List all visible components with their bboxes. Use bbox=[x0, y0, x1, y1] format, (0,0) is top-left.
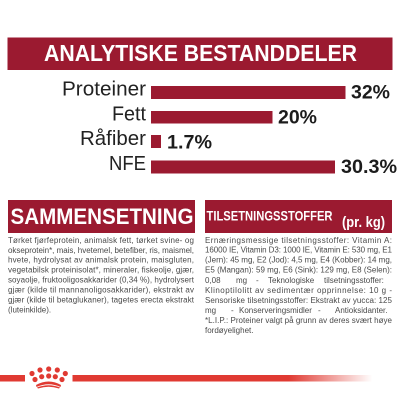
text block: additives: mg bbox=[236, 276, 247, 285]
row: NFE 30.3%: NFE bbox=[109, 153, 146, 175]
text block: additives: Antioksidanter. bbox=[335, 306, 387, 315]
row: Proteiner 32%: 32% bbox=[351, 82, 390, 104]
row: Fett 20% bbox=[112, 104, 317, 128]
heading: Sammensetning: SAMMENSETNING bbox=[10, 204, 194, 229]
text block: additives: Teknologiske bbox=[268, 276, 315, 285]
text block: additives: Sensoriske tilsetningsstoffer: Ekstrakt av yucca: 125 bbox=[205, 296, 393, 305]
row: Proteiner 32%: Proteiner bbox=[62, 78, 146, 100]
text block: additives bbox=[205, 236, 393, 335]
text block: additives: fordøyelighet. bbox=[205, 326, 253, 335]
footer line bbox=[0, 375, 372, 382]
row: Fett 20%: Fett bbox=[112, 104, 146, 126]
text block: additives: E5 (Mangan): 59 mg, E6 (Sink): 129 mg, E8 (Selen): bbox=[205, 266, 392, 274]
text block: composition: okseprotein*, mais, hvetemel, betefiber, ris, maismel, bbox=[8, 246, 194, 255]
text block: composition: Tørket fjørfeprotein, animalsk fett, tørket svine- og bbox=[8, 236, 194, 245]
row: NFE 30.3%: 30.3% bbox=[341, 157, 397, 178]
text block: composition: (luteinkilde). bbox=[8, 306, 51, 314]
row: Råfiber 1.7% bbox=[80, 128, 212, 154]
text block: additives: - bbox=[318, 306, 321, 315]
text block: additives: Konserveringsmidler bbox=[239, 306, 312, 315]
text block: composition: vegetabilsk proteinisolat*, mineraler, fiskeolje, gjær, bbox=[8, 266, 194, 274]
heading: Tilsetningsstoffer bbox=[205, 200, 392, 233]
icon: crown logo bbox=[29, 366, 68, 388]
heading: Tilsetningsstoffer: TILSETNINGSSTOFFER bbox=[206, 208, 332, 224]
text block: additives: (Jern): 45 mg, E2 (Jod): 4,5 mg, E4 (Kobber): 14 mg, bbox=[205, 256, 392, 264]
text block: additives: Ernæringsmessige tilsetningsstoffer: Vitamin A: bbox=[205, 236, 392, 245]
row: NFE 30.3% bbox=[109, 153, 397, 178]
title banner: ANALYTISKE BESTANDDELER bbox=[44, 40, 357, 66]
text block: composition: gjær (kilde til mannanoligosakkarider), ekstrakt av bbox=[8, 286, 194, 294]
row: Råfiber 1.7%: Råfiber bbox=[80, 128, 146, 150]
row: Fett 20%: 20% bbox=[278, 108, 317, 128]
text block: additives: mg bbox=[205, 306, 216, 315]
row: Råfiber 1.7%: 1.7% bbox=[167, 132, 212, 154]
text block: composition: gjær (kilde til betaglukaner), tagetes erecta ekstrakt bbox=[8, 296, 195, 304]
text block: additives: - bbox=[231, 306, 234, 315]
text block: additives: 0,08 bbox=[205, 276, 221, 285]
text block: composition: soyaolje, fruktooligosakkarider (0,34 %), hydrolysert bbox=[8, 276, 195, 284]
text block: additives: *L.I.P.: Proteiner valgt på grunn av deres svært høye bbox=[205, 316, 393, 325]
text block: composition: hvete, hydrolysat av animalsk protein, maisgluten, bbox=[8, 256, 194, 264]
text block: additives: 16000 IE, Vitamin D3: 1000 IE, Vitamin E: 530 mg, E1 bbox=[205, 246, 393, 254]
text block: additives: Klinoptilolitt av sedimentær opprinnelse: 10 g - bbox=[205, 286, 392, 295]
text block: additives: - bbox=[256, 276, 259, 285]
text block: additives: tilsetningsstoffer: bbox=[324, 276, 384, 285]
heading: Tilsetningsstoffer: (pr. kg) bbox=[342, 214, 385, 231]
text block: composition bbox=[8, 236, 195, 314]
row: Proteiner 32% bbox=[62, 78, 390, 104]
bar chart: analytical constituents bbox=[62, 78, 397, 178]
